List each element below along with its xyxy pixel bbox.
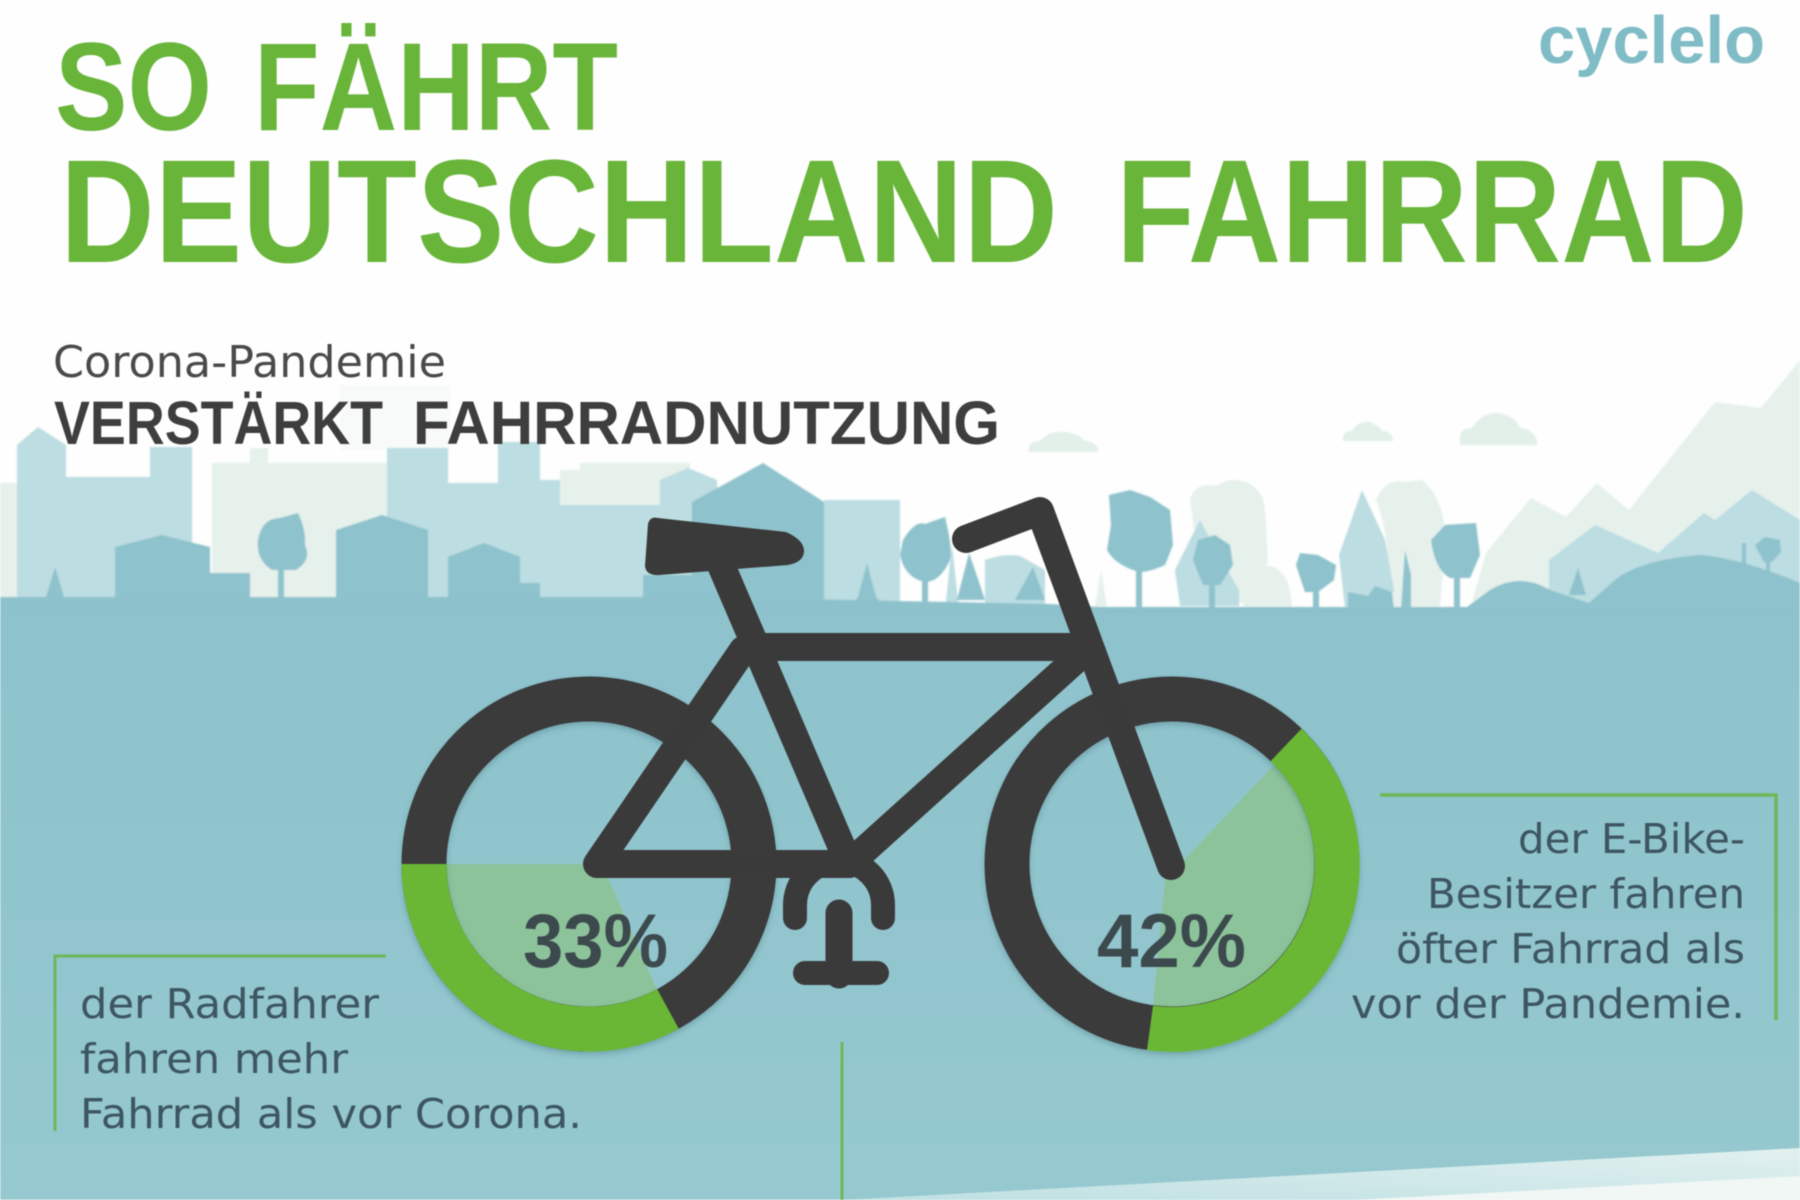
heading: Verstärkt Fahrradnutzung: VERSTÄRKT: [54, 389, 383, 457]
heading: Corona-Pandemie: Corona-Pandemie: [53, 337, 446, 388]
fork and handlebar: [966, 511, 1171, 866]
bottom road highlight: [842, 1148, 1800, 1200]
callout: right: öfter Fahrrad als: [1396, 925, 1745, 973]
heading: Verstärkt Fahrradnutzung: [54, 389, 1000, 457]
subheading block: [53, 337, 1000, 457]
right wheel: 42 percent: [1007, 699, 1337, 1030]
main title: [55, 18, 1748, 294]
center connector line: [840, 1042, 844, 1200]
front houses and trees: [42, 463, 1800, 620]
main title: DEUTSCHLAND: [60, 130, 1058, 294]
crank and pedal: [795, 861, 883, 975]
callout: left: Fahrrad als vor Corona.: [80, 1090, 582, 1138]
callout: left: [55, 956, 582, 1138]
main title: FÄHRT: [254, 18, 618, 157]
heading: Verstärkt Fahrradnutzung: FAHRRADNUTZUNG: [413, 389, 1000, 457]
ground: [0, 597, 1800, 1200]
callout: right: vor der Pandemie.: [1351, 980, 1745, 1028]
callout: left: fahren mehr: [80, 1035, 348, 1083]
clouds: [1029, 413, 1537, 452]
callout: left: der Radfahrer: [80, 980, 379, 1028]
bike frame: [597, 565, 1081, 864]
left wheel: 33 percent: [424, 699, 754, 1029]
bicycle with percentage wheels: [424, 511, 1337, 1030]
callout: right: [1351, 795, 1776, 1028]
saddle: [645, 518, 804, 575]
callout: right: Besitzer fahren: [1427, 870, 1745, 918]
landscape illustration: [0, 360, 1800, 1200]
percentage: 33%: 33%: [523, 899, 668, 984]
mid skyline and mountains: [17, 427, 1800, 610]
callout: right: der E-Bike-: [1518, 815, 1745, 863]
main title: SO: [55, 18, 212, 157]
logo: cyclelo: cyclelo: [1538, 3, 1765, 78]
far background: light skyline and mountains: [0, 360, 1800, 610]
percentage: 42%: 42%: [1097, 899, 1246, 984]
